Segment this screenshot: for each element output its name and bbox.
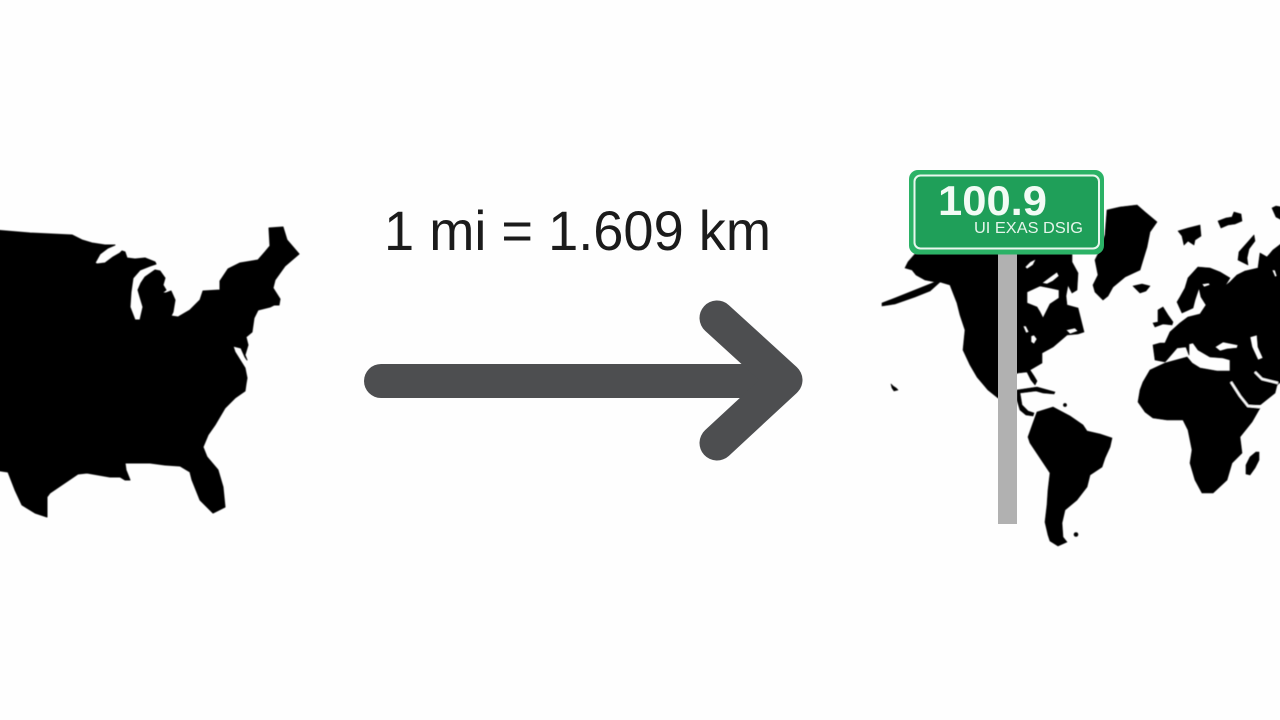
- Cuba and Central America: [1017, 387, 1055, 416]
- sign number: 100.9: [938, 177, 1047, 224]
- arrow: [381, 318, 785, 443]
- Arctic islands: [1178, 225, 1201, 245]
- conversion label: 1 mi = 1.609 km: [384, 199, 771, 262]
- North America east: [1010, 254, 1084, 385]
- small islands: [891, 384, 898, 391]
- map: world silhouette: [882, 205, 1280, 546]
- North America west: [882, 254, 1005, 398]
- Britain: [1153, 307, 1173, 327]
- map: contiguous United States silhouette: [0, 227, 299, 517]
- sign post: [998, 254, 1017, 524]
- Eurasia and Arabia: [1153, 240, 1280, 405]
- South America: [1028, 407, 1112, 546]
- Red Sea and Persian Gulf: [1231, 372, 1278, 407]
- Greenland: [1093, 205, 1157, 300]
- Africa: [1138, 357, 1260, 493]
- Madagascar: [1246, 452, 1259, 475]
- Iceland: [1133, 284, 1150, 293]
- sign subtext: UI EXAS DSIG: [974, 220, 1083, 237]
- road sign: [909, 170, 1104, 254]
